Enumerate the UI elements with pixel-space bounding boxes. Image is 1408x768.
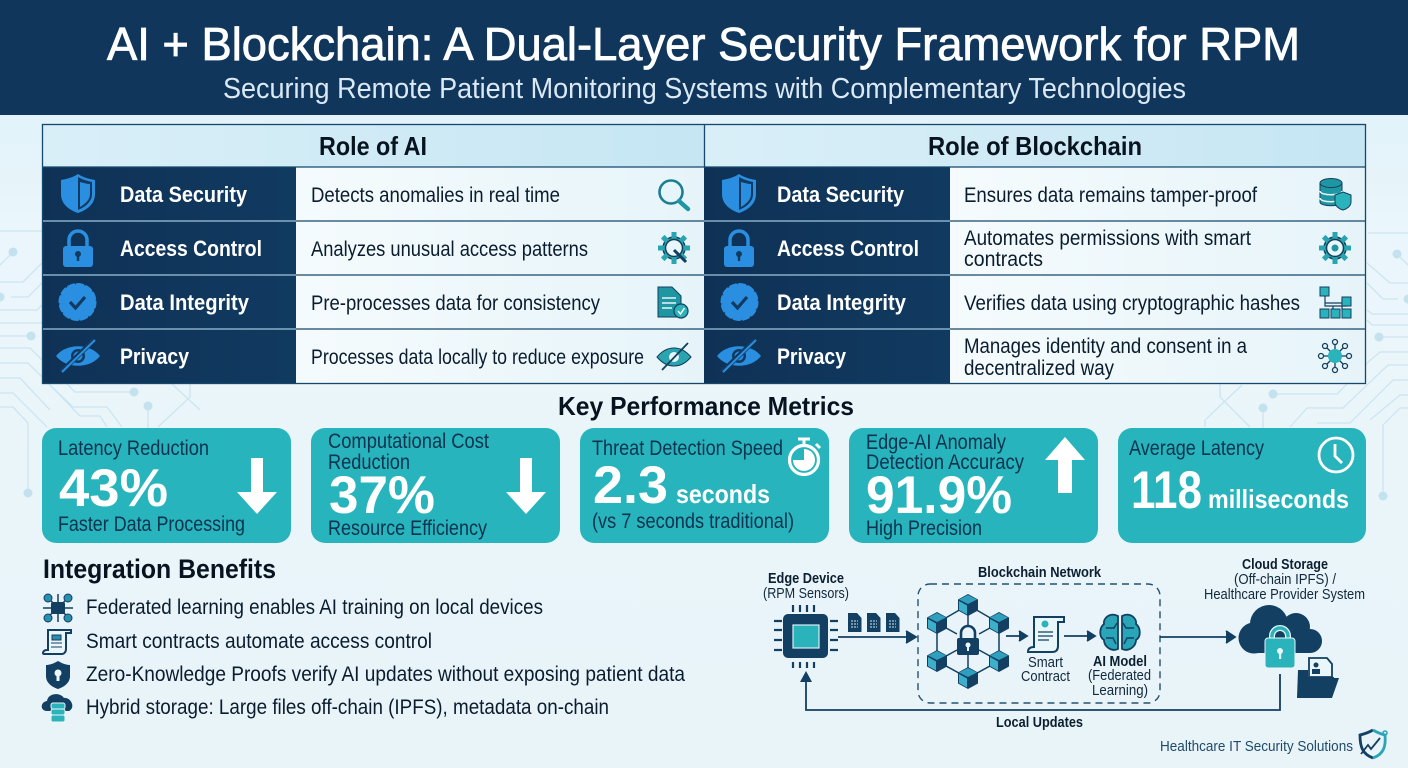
metric card: latency reduction: Latency Reduction [58,437,209,460]
metric card: edge-AI anomaly detection accuracy: Detection Accuracy [866,451,1024,474]
cloud storage: Healthcare Provider System [1204,587,1365,603]
metric card: edge-AI anomaly detection accuracy: High Precision [866,517,982,540]
row: access control: Analyzes unusual access patterns [311,238,588,261]
row: privacy: decentralized way [964,357,1114,380]
row: access control: contracts [964,248,1043,271]
row: access control: Access Control [777,236,919,261]
AI model: (Federated [1088,668,1151,684]
metric card: threat detection speed: Threat Detection Speed [592,437,783,460]
benefit: smart contracts: Smart contracts automate access control [86,630,432,653]
header banner [0,0,1408,115]
comparison table [42,124,1366,384]
metric card: latency reduction: 43% [59,459,168,518]
row: access control: Automates permissions with smart [964,227,1251,250]
smart contract [1021,617,1070,685]
row: data security: Detects anomalies in real time [311,184,560,207]
metric card: edge-AI anomaly detection accuracy [849,428,1098,543]
heading: role of blockchain: Role of Blockchain [928,131,1142,161]
row: data security: Data Security [120,182,248,207]
metric card: computational cost reduction: Reduction [328,451,410,474]
row: data security [61,174,688,213]
blockchain network box [918,565,1160,703]
metric card: computational cost reduction: Resource Efficiency [328,517,487,540]
smart contract: Contract [1021,669,1070,685]
arrow: network to contract [1006,631,1027,641]
smart contract: Smart [1028,655,1063,671]
row: access control [724,227,1351,271]
row: data integrity: Verifies data using cryptographic hashes [964,292,1300,315]
icon: clock [1319,438,1353,472]
blockchain network box: Blockchain Network [978,565,1102,581]
metric card: latency reduction [42,428,291,543]
benefit: hybrid storage [42,694,609,722]
panel: role of AI [42,124,704,383]
icon: stopwatch [790,439,820,474]
metric card: computational cost reduction: Computational Cost [328,430,489,453]
cloud storage: (Off-chain IPFS) / [1234,572,1337,588]
metric card: average latency: Average Latency [1129,437,1264,460]
metric card: average latency: milliseconds [1208,484,1349,514]
row: data security: Data Security [777,182,905,207]
arrow: edge to blockchain [838,631,916,643]
background circuit pattern [0,231,1408,500]
benefit: zero-knowledge proofs: Zero-Knowledge Proofs verify AI updates without exposing patient data [86,663,685,686]
metric card: average latency [1118,428,1366,543]
footer brand text: Healthcare IT Security Solutions [1160,739,1353,755]
metric card: average latency: 118 [1131,461,1202,520]
AI model [1088,615,1151,699]
row: privacy [56,340,691,372]
AI model: AI Model [1093,654,1147,670]
heading: integration benefits: Integration Benefits [43,554,276,584]
row: data integrity: Data Integrity [777,290,907,315]
metric card: edge-AI anomaly detection accuracy: Edge-AI Anomaly [866,431,1006,454]
row: privacy: Manages identity and consent in a [964,335,1247,358]
benefit: federated learning [43,594,543,622]
metric card: threat detection speed: (vs 7 seconds traditional) [592,510,794,533]
architecture diagram [763,557,1365,731]
arrowhead: local updates [800,671,812,682]
AI model: Learning) [1092,683,1148,699]
row: data integrity: Data Integrity [120,290,250,315]
arrow: contract to AI [1064,631,1095,641]
row: data security: Ensures data remains tamper-proof [964,184,1257,207]
row: data integrity [722,285,1351,319]
arrow: blockchain to cloud [1160,631,1235,643]
metric card: threat detection speed: seconds [676,479,770,509]
icon: footer shield logo [1360,730,1387,758]
folder with record [1297,658,1339,698]
label: local updates: Local Updates [996,715,1083,731]
row: privacy: Privacy [120,344,190,369]
panel: role of blockchain [704,124,1366,383]
edge device: Edge Device [768,571,844,587]
cloud storage [1204,557,1365,668]
metric card: computational cost reduction [311,428,560,543]
data packets [848,613,900,632]
edge device [763,571,849,668]
cloud storage: Cloud Storage [1242,557,1328,573]
metric card: edge-AI anomaly detection accuracy: 91.9% [866,466,1012,525]
metric card: computational cost reduction: 37% [329,466,435,525]
row: data integrity [60,285,688,319]
benefit: hybrid storage: Hybrid storage: Large files off-chain (IPFS), metadata on-chain [86,696,609,719]
row: data integrity: Pre-processes data for consistency [311,292,600,315]
heading: role of AI: Role of AI [319,131,427,161]
row: privacy [717,335,1352,380]
row: privacy: Privacy [777,344,847,369]
blockchain hex network [927,594,1009,689]
row: data security [722,174,1351,213]
row: access control: Access Control [120,236,262,261]
row: access control [63,231,690,267]
metric card: latency reduction: Faster Data Processing [58,513,245,536]
benefit: federated learning: Federated learning enables AI training on local devices [86,596,543,619]
metric card: threat detection speed [580,428,829,543]
metric card: threat detection speed: 2.3 [593,456,668,515]
title: AI + Blockchain: A Dual-Layer Security Framework for RPM [107,18,1300,70]
edge device: (RPM Sensors) [763,586,849,602]
subtitle: Securing Remote Patient Monitoring Systems with Complementary Technologies [223,73,1186,105]
row: privacy: Processes data locally to reduce exposure [311,346,644,369]
arrow: local updates loop [806,674,1280,710]
heading: key performance metrics: Key Performance Metrics [558,391,854,421]
